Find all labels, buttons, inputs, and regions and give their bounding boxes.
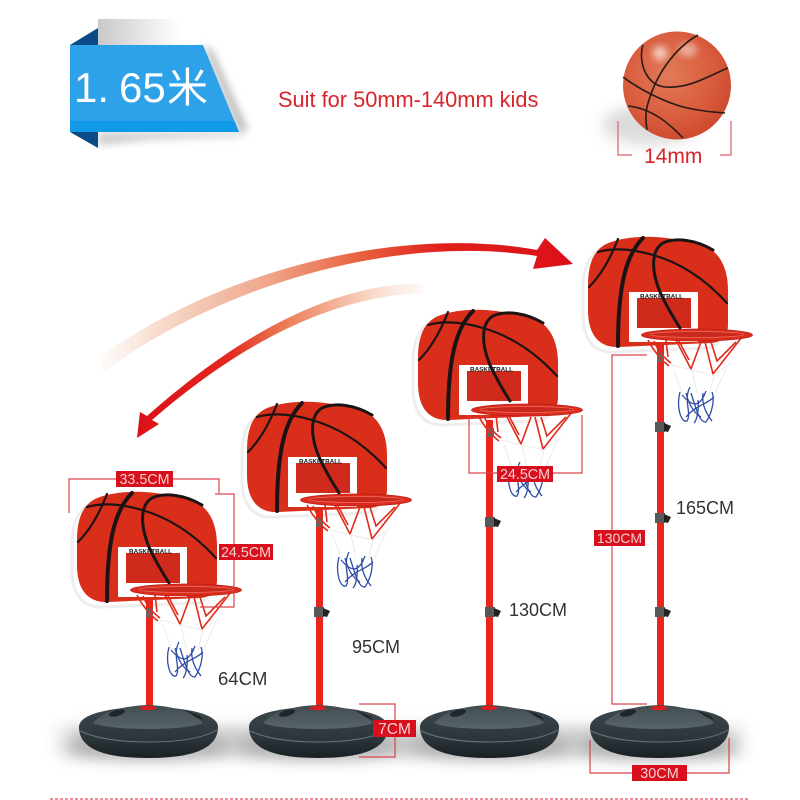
dimension: board height 24.5CM	[200, 494, 273, 607]
height label 165CM: 165CM	[676, 498, 734, 518]
hoop 1: 64 cm	[66, 492, 242, 761]
dimension: base width 30CM: 30CM	[640, 766, 679, 782]
dimension: 130CM: 130CM	[597, 530, 642, 546]
hoop 1: 64 cm: BASKETBALL	[129, 548, 172, 556]
dimension: board width 33.5CM: 33.5CM	[119, 472, 170, 488]
dimension: base thickness 7CM	[359, 704, 416, 757]
dimension: board width 33.5CM	[69, 471, 219, 513]
icon: basketball	[602, 32, 731, 145]
dimension: hoop 3 label 24.5CM	[469, 415, 582, 483]
dotted footer rule	[50, 798, 750, 800]
hoop 4: 165 cm	[577, 237, 752, 761]
hoop 2: 95 cm	[236, 402, 412, 761]
hoop 4: 165 cm: BASKETBALL	[640, 294, 683, 300]
dimension: 130CM	[594, 355, 647, 704]
banner label: 1.	[74, 64, 109, 111]
hoop 3: 130 cm	[407, 310, 582, 761]
height label 95CM: 95CM	[352, 637, 400, 657]
height label 64CM: 64CM	[218, 668, 267, 689]
shadow band under bases	[50, 726, 750, 758]
ball size label: 14mm	[644, 145, 702, 168]
banner label: 65	[119, 64, 166, 111]
size bracket	[618, 121, 731, 155]
arrow: downward adjustment	[137, 283, 423, 438]
hoop 2: 95 cm: BASKETBALL	[299, 458, 342, 466]
dimension: board height 24.5CM: 24.5CM	[221, 545, 271, 561]
hoop 3: 130 cm: BASKETBALL	[470, 366, 513, 374]
arrow: upward growth	[100, 238, 573, 372]
dimension: base thickness 7CM: 7CM	[378, 721, 411, 738]
banner label: 米	[167, 65, 208, 111]
banner: 1.65 metre badge	[70, 19, 248, 148]
heading: age suitability: Suit for 50mm-140mm kids	[278, 87, 539, 112]
dimension: hoop 3 label 24.5CM: 24.5CM	[500, 467, 550, 483]
ball with size bracket	[602, 32, 731, 168]
dimension: base width 30CM	[590, 738, 729, 782]
height label 130CM: 130CM	[509, 600, 567, 620]
